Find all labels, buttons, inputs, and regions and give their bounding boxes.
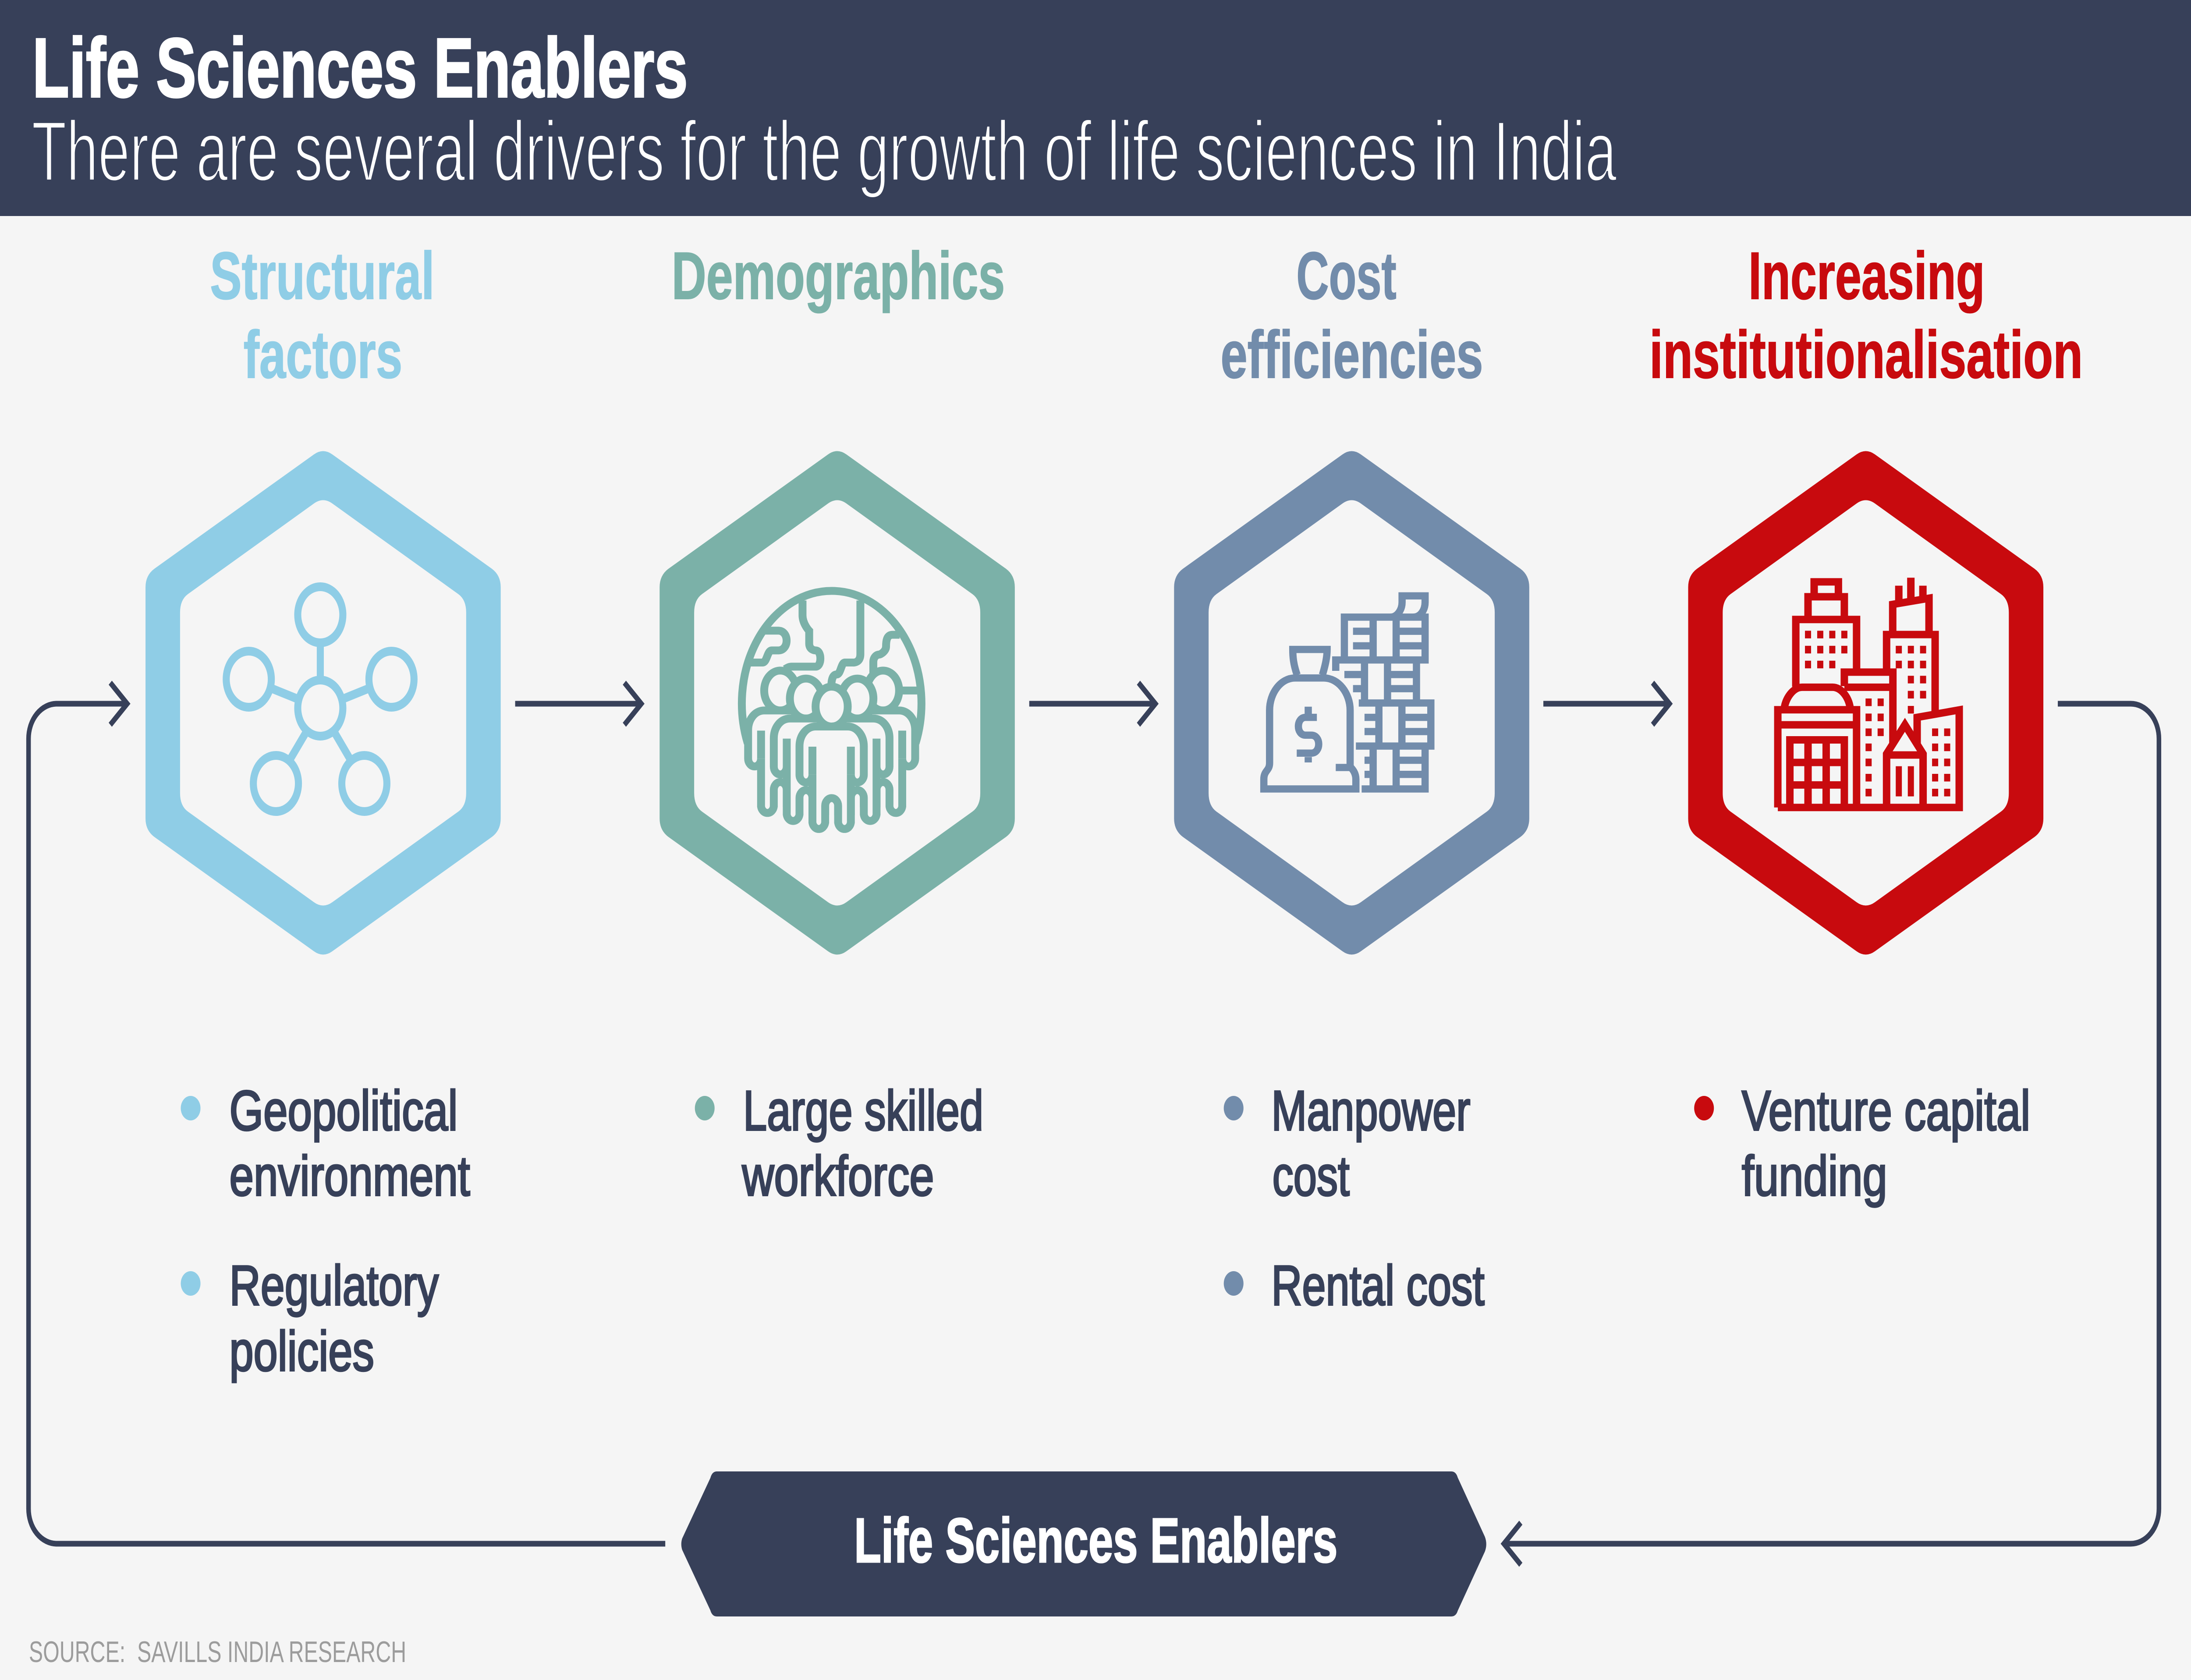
source note: SOURCE: SAVILLS INDIA RESEARCH <box>29 1635 406 1669</box>
central label: Life Sciences Enablers: Life Sciences Enablers <box>854 1505 1337 1576</box>
bullet list: structural factors <box>181 1079 470 1383</box>
bullet list: demographics: Large skilled <box>743 1079 983 1142</box>
hexagon: demographics <box>659 451 1015 954</box>
heading: Increasing institutionalisation: institutionalisation <box>1649 317 2083 392</box>
icon: money bag and banknote stacks <box>1264 596 1431 789</box>
bullet list: increasing institutionalisation: Venture capital <box>1742 1079 2030 1142</box>
bullet list: cost efficiencies <box>1224 1079 1485 1317</box>
arrow: cost to institutionalisation <box>1543 683 1670 725</box>
hexagon: structural factors <box>145 451 501 954</box>
heading: Structural factors <box>210 238 434 392</box>
hexagon: cost efficiencies <box>1174 451 1529 954</box>
icon: network nodes <box>226 587 414 812</box>
central label: Life Sciences Enablers <box>681 1471 1486 1616</box>
arrow: demographics to cost <box>1029 683 1156 725</box>
bullet list: structural factors: environment <box>229 1144 470 1208</box>
arrow: loop from enablers label into structural factors <box>28 683 665 1544</box>
bullet list: increasing institutionalisation: funding <box>1742 1144 1887 1208</box>
heading: Structural factors: factors <box>244 317 402 392</box>
heading: Cost efficiencies: efficiencies <box>1220 317 1483 392</box>
icon: city buildings <box>1778 578 1959 808</box>
heading: Increasing institutionalisation: Increasing <box>1748 238 1985 313</box>
bullet list: increasing institutionalisation <box>1694 1079 2030 1208</box>
subtitle: There are several drivers for the growth of life sciences in India <box>32 104 1617 199</box>
hexagon: increasing institutionalisation <box>1688 451 2043 954</box>
bullet list: structural factors: policies <box>229 1319 374 1383</box>
bullet list: demographics <box>695 1079 983 1208</box>
arrow: loop from institutionalisation into enablers label <box>1504 704 2159 1565</box>
bullet list: cost efficiencies: Rental cost <box>1271 1254 1485 1317</box>
bullet list: structural factors: Regulatory <box>229 1254 439 1317</box>
header banner <box>0 0 2191 216</box>
heading: Cost efficiencies: Cost <box>1296 238 1397 313</box>
arrow: structural to demographics <box>515 683 641 725</box>
heading: Cost efficiencies <box>1220 238 1483 392</box>
bullet list: cost efficiencies: cost <box>1273 1144 1350 1208</box>
bullet list: demographics: workforce <box>742 1144 934 1208</box>
bullet list: structural factors: Geopolitical <box>229 1079 458 1142</box>
icon: people and globe <box>742 591 922 829</box>
heading: Structural factors: Structural <box>210 238 434 313</box>
heading: Demographics: Demographics <box>672 238 1005 313</box>
bullet list: cost efficiencies: Manpower <box>1271 1079 1471 1142</box>
title: Life Sciences Enablers <box>32 21 688 115</box>
heading: Increasing institutionalisation <box>1649 238 2083 392</box>
